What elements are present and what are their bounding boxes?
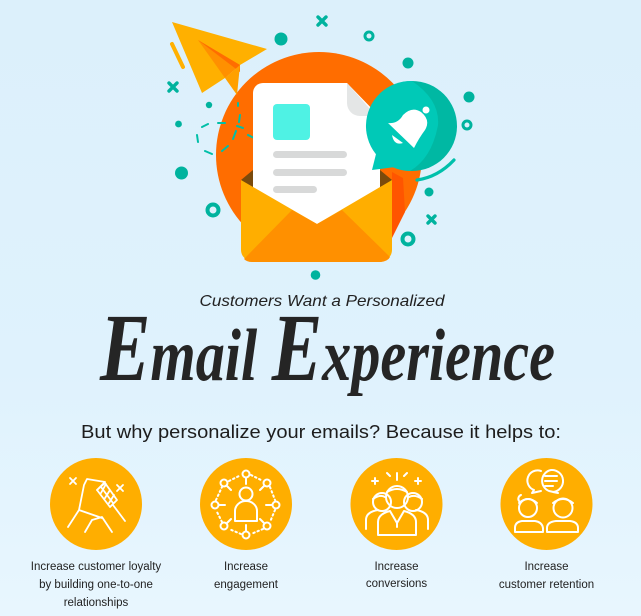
benefit: customer loyalty (31, 458, 161, 609)
section heading: But why personalize your emails? Because it helps to: (81, 422, 561, 442)
icon: handshake fist (50, 458, 142, 550)
subtitle: Customers Want a Personalized (200, 293, 446, 310)
main title: Email Experience (99, 294, 555, 401)
label: by building one-to-one (39, 579, 153, 591)
orange background circle (216, 52, 422, 258)
benefit: customer retention (499, 458, 594, 591)
envelope (241, 170, 405, 262)
label: relationships (64, 597, 129, 609)
label: Increase (374, 561, 419, 573)
label: engagement (214, 579, 279, 591)
label: Increase customer loyalty (31, 561, 161, 573)
paper plane (172, 22, 267, 95)
icon: two people talking (500, 458, 592, 550)
label: Increase (524, 561, 569, 573)
icon: group of people (350, 458, 442, 550)
benefit: engagement (200, 458, 292, 591)
label: Increase (224, 561, 268, 573)
teal arc (417, 160, 454, 180)
icon: connected person (200, 458, 292, 550)
document (253, 83, 380, 232)
motion line (172, 44, 183, 67)
confetti dots (175, 32, 474, 280)
confetti rings (208, 32, 471, 244)
label: conversions (366, 578, 427, 590)
bell icon (388, 106, 430, 148)
confetti crosses (169, 17, 435, 223)
label: customer retention (499, 579, 594, 591)
dashed flight path (197, 103, 254, 154)
illustration: email hero (169, 17, 474, 280)
benefit: conversions (350, 458, 442, 590)
notification bubble with bell (366, 81, 457, 171)
